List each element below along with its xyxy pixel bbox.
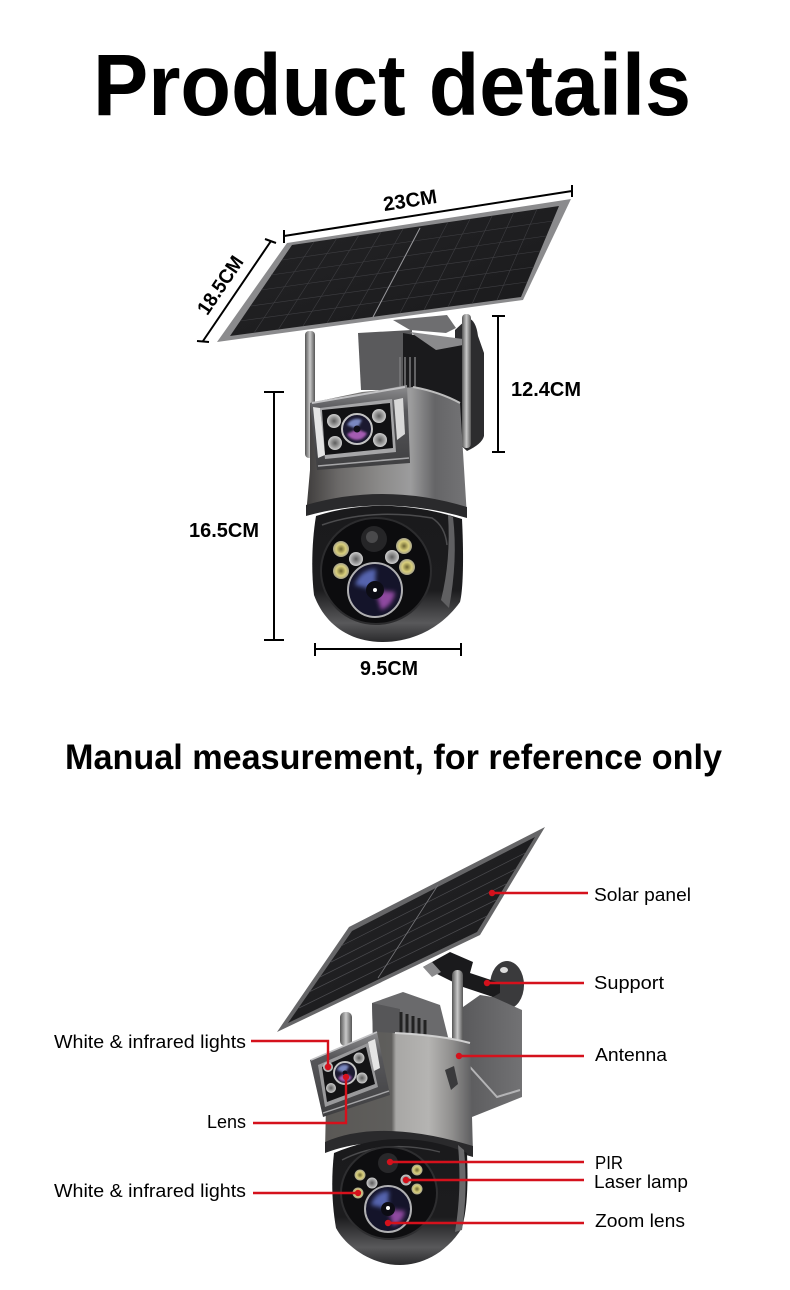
subtitle: Manual measurement, for reference only (65, 738, 723, 777)
upper lens (342, 414, 372, 444)
callout: laser lamp (403, 1171, 688, 1192)
callout: zoom lens: Zoom lens (595, 1210, 685, 1231)
camera with dimensions (189, 185, 581, 680)
rear parts: bracket, block, back plate, support (340, 952, 524, 1117)
callout: lens (207, 1074, 349, 1132)
dimension: 9.5CM (315, 643, 461, 680)
callout: PIR (387, 1152, 623, 1173)
callout: solar panel: Solar panel (594, 884, 691, 905)
solar camera: rear parts (305, 314, 484, 458)
dual-lens upper module (310, 385, 410, 470)
dimension: 12.4CM: 12.4CM (511, 379, 581, 401)
dimension: 18.5CM (193, 239, 276, 342)
dimension: 16.5CM (189, 392, 284, 640)
dome lens (348, 563, 402, 617)
dual-lens upper module (310, 1032, 390, 1117)
callout: upper white and infrared lights (54, 1031, 331, 1070)
callout: PIR: PIR (595, 1152, 623, 1173)
callout: solar panel (489, 884, 691, 905)
callout: lower white and infrared lights (54, 1180, 361, 1201)
camera dome (332, 1139, 467, 1265)
callout: laser lamp: Laser lamp (594, 1171, 688, 1192)
dimension: 23CM (284, 185, 572, 243)
callout: support: Support (594, 972, 664, 993)
dimension: 23CM: 23CM (382, 186, 439, 216)
camera body (306, 387, 467, 518)
callout: support (484, 972, 664, 993)
upper lens (334, 1062, 356, 1084)
callout: zoom lens (385, 1210, 685, 1231)
dimension: 18.5CM: 18.5CM (193, 252, 248, 319)
dimension: 9.5CM: 9.5CM (360, 658, 418, 680)
solar panel, dimension view (217, 199, 571, 342)
solar panel, annotated view (277, 827, 545, 1032)
callout: lower white and infrared lights: White & infrared lights (54, 1180, 246, 1201)
callout: upper white and infrared lights: White & infrared lights (54, 1031, 246, 1052)
callout: antenna: Antenna (595, 1044, 668, 1065)
annotated camera (54, 827, 691, 1265)
dimension: 16.5CM: 16.5CM (189, 520, 259, 542)
dome lens (365, 1186, 411, 1232)
camera dome (312, 506, 463, 642)
callout: antenna (456, 1044, 668, 1065)
title: Product details (93, 37, 691, 134)
dimension: 12.4CM (492, 316, 581, 452)
camera body (325, 1032, 473, 1157)
callout: lens: Lens (207, 1111, 246, 1132)
